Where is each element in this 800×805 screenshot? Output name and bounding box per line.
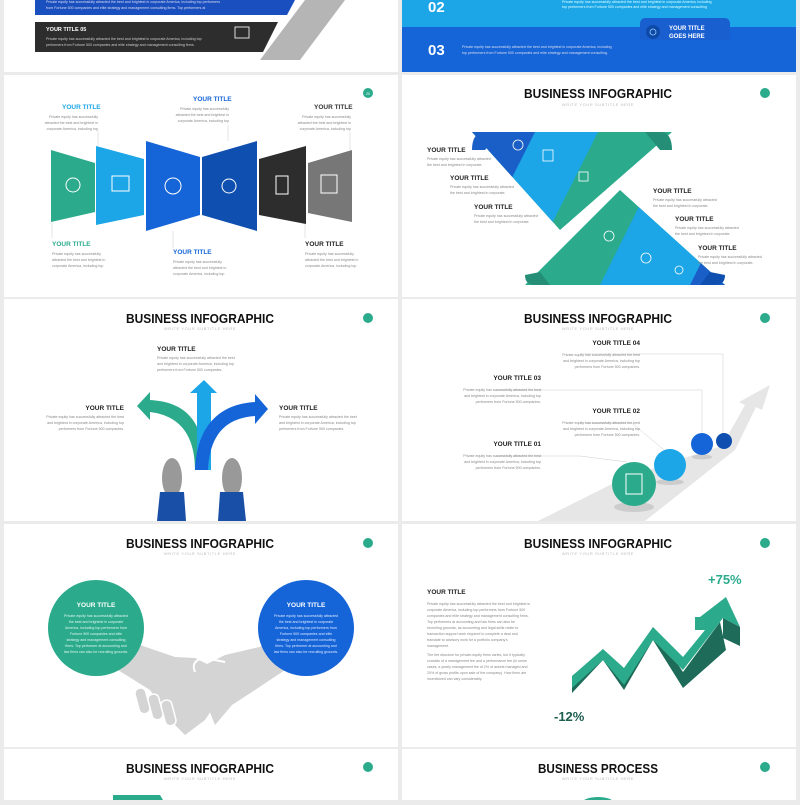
circle: blue: the best and brightest in corporate [279,620,333,624]
panel: slide 23 road: and brightest in corporate America, including top [464,460,541,464]
tab: your title goes here [640,18,730,40]
text blocks: corporate America, including top [52,264,103,268]
circle: teal: firms. Top performer at accounting and [65,644,127,648]
accordion panels [51,141,352,231]
text block: cases, a yearly management fee of 2% of assets managed and [427,665,528,669]
Z text blocks: the best and brightest in corporate. [450,191,506,195]
road arrow [538,385,770,521]
tab: your title goes here: YOUR TITLE [669,26,705,32]
tab: your title goes here: GOES HERE [669,34,705,40]
dark bar: your title 05: performers from Fortune 500 companies and elite strategy and management consulting firms. [46,43,195,47]
text blocks: corporate America, including top [305,264,356,268]
panel: slide 27 (partial): BUSINESS PROCESS [538,761,658,776]
text blocks: attracted the best and brightest in [176,113,229,117]
feet [157,458,246,521]
circle: teal: the best and brightest in corporate [69,620,123,624]
circle: blue: strategy and management consulting [277,638,335,642]
circle: blue: firms. Top performer at accounting and [275,644,337,648]
panel: slide 20 accordion [4,75,398,297]
circle: blue: law firms can also be recruiting grounds. [274,650,338,654]
text blocks: Private equity has successfully [52,252,101,256]
circle: teal: Fortune 500 companies and elite [70,632,122,636]
text blocks: Private equity has successfully [302,115,351,119]
panel: slide top-left (partial): from Fortune 500 companies and elite strategy and management consulting firms. Top performers at [46,6,205,10]
panel: slide 21 Z shape: WRITE YOUR SUBTITLE HERE [562,102,634,107]
arrow text: YOUR TITLE [157,346,196,353]
circle: blue: YOUR TITLE [287,602,326,609]
text blocks: Private equity has successfully [180,107,229,111]
text block: The fee structure for private-equity firms varies, but it typically [427,653,525,657]
dark bar: your title 05: Private equity has successfully attracted the best and brightest in corporate America, including top [46,37,202,41]
text block: consists of a management fee and a performance fee (in some [427,659,527,663]
text blocks: corporate America, including top [300,127,351,131]
Z text blocks: Private equity has successfully attracted [675,226,739,230]
Z text blocks: YOUR TITLE [427,147,466,154]
arrow text: Private equity has successfully attracted the best [157,356,235,360]
panel: slide 23 road: performers from Fortune 500 companies. [476,400,541,404]
circle: teal [48,580,144,676]
arrow text: Private equity has successfully attracted the best [46,415,124,419]
arrow text: and brightest in corporate America, including top [47,421,124,425]
text blocks: attracted the best and brightest in [45,121,98,125]
text blocks: YOUR TITLE [173,249,212,256]
text blocks: Private equity has successfully [173,260,222,264]
text blocks: corporate America, including top [173,272,224,276]
circle: blue [258,580,354,676]
panel: slide 23 road: and brightest in corporate America, including top [464,394,541,398]
arrows [137,380,268,470]
panel: slide 23 road: YOUR TITLE 03 [493,375,541,382]
panel: slide 26 (partial): WRITE YOUR SUBTITLE HERE [164,776,236,781]
Z text blocks: the best and brightest in corporate. [427,163,483,167]
panel: slide top-right (partial): 03 [428,42,445,59]
panel: slide 23 road: and brightest in corporate America, including top [563,359,640,363]
Z text blocks: Private equity has successfully attracted [474,214,538,218]
arrow text: YOUR TITLE [279,405,318,412]
Z text blocks: Private equity has successfully attracted [427,157,491,161]
panel: slide top-right (partial): top performers from Fortune 500 companies and elite strategy and management consulting [562,5,707,9]
text blocks: YOUR TITLE [52,241,91,248]
text blocks: YOUR TITLE [305,241,344,248]
text blocks: YOUR TITLE [62,104,101,111]
circle: teal: law firms can also be recruiting grounds. [64,650,128,654]
panel: slide 25 growth arrow: WRITE YOUR SUBTITLE HERE [562,551,634,556]
text block: Private equity has successfully attracted the best and brightest in [427,602,530,606]
circle: teal: America, including top performers from [65,626,127,630]
panel: slide 25 growth arrow: -12% [554,709,585,724]
panel: slide top-right (partial): Private equity has successfully attracted the best and brightest in corporate America, including [462,45,612,49]
text block: recruiting grounds, as accounting and legal skills relate to [427,626,518,630]
Z text blocks: YOUR TITLE [450,175,489,182]
panel: slide 23 road: and brightest in corporate America, including top [563,427,640,431]
Z text blocks: the best and brightest in corporate. [474,220,530,224]
panel: slide top-right (partial) [402,0,796,72]
circle: blue: America, including top performers from [275,626,337,630]
text blocks: attracted the best and brightest in [52,258,105,262]
Z text blocks: the best and brightest in corporate. [653,204,709,208]
dark bar: your title 05 [35,22,278,52]
panel: slide 23 road [402,299,796,521]
panel: slide 23 road: YOUR TITLE 02 [592,408,640,415]
Z graphic [472,132,725,285]
panel: slide 23 road: WRITE YOUR SUBTITLE HERE [562,326,634,331]
panel: slide 23 road: performers from Fortune 500 companies. [476,466,541,470]
panel: slide 23 road: Private equity has successfully attracted the best [562,421,640,425]
panel: slide 22 crossroads [4,299,398,521]
arrow text: and brightest in corporate America, including top [279,421,356,425]
text blocks: YOUR TITLE [193,96,232,103]
circle: blue: Fortune 500 companies and elite [280,632,332,636]
text blocks: attracted the best and brightest in [173,266,226,270]
text blocks: corporate America, including top [178,119,229,123]
panel: slide 22 crossroads: BUSINESS INFOGRAPHIC [126,311,275,326]
text blocks [45,96,358,276]
panel: slide 26 (partial): BUSINESS INFOGRAPHIC [126,761,275,776]
panel: slide 21 Z shape [400,75,800,297]
panel: slide 25 growth arrow: +75% [708,572,742,587]
circles [612,433,732,512]
arrow text: Private equity has successfully attracted the best [279,415,357,419]
panel: slide 23 road: Private equity has successfully attracted the best [463,388,541,392]
Z text blocks: YOUR TITLE [474,204,513,211]
panel: slide 26 (partial) [4,749,398,800]
panel: slide top-left (partial) [4,0,398,72]
circle: teal: strategy and management consulting [67,638,125,642]
panel: slide 22 crossroads: WRITE YOUR SUBTITLE HERE [164,326,236,331]
arrow text: and brightest in corporate America, including top [157,362,234,366]
arrow text [46,346,357,431]
panel: slide 24 handshake [4,524,398,747]
text block: management. [427,644,449,648]
handshake [118,645,285,735]
arrow text: YOUR TITLE [85,405,125,412]
text block: translate to advisory work for a portfolio company's [427,638,508,642]
dark bar: your title 05: YOUR TITLE 05 [46,27,86,33]
panel: slide 23 road: Private equity has successfully attracted the best [562,353,640,357]
Z text blocks: YOUR TITLE [653,188,692,195]
panel: slide 23 road: YOUR TITLE 01 [493,441,541,448]
panel: slide top-right (partial): top performers from Fortune 500 companies and elite strategy and management consulting. [462,51,608,55]
blue bar [35,0,295,15]
text block: companies and elite strategy and management consulting firms. [427,614,529,618]
panel: slide 23 road: performers from Fortune 500 companies. [575,365,640,369]
panel: slide top-left (partial): Private equity has successfully attracted the best and brightest in corporate America, including top performers [46,0,220,4]
arrow text: performers from Fortune 500 companies. [157,368,222,372]
Z text blocks: Private equity has successfully attracted [653,198,717,202]
Z text blocks: Private equity has successfully attracted [698,255,762,259]
panel: slide 23 road: BUSINESS INFOGRAPHIC [524,311,673,326]
zigzag arrow [572,597,740,693]
panel: slide 24 handshake: BUSINESS INFOGRAPHIC [126,536,275,551]
panel: slide 20 accordion: 20 [366,92,370,96]
arrow text: performers from Fortune 500 companies. [59,427,124,431]
text blocks: attracted the best and brightest in [298,121,351,125]
Z text blocks [427,147,762,265]
Z text blocks: the best and brightest in corporate. [675,232,731,236]
text block: Top performers at accounting and law firms can also be [427,620,515,624]
text block [427,589,530,681]
panel: slide top-right (partial): Private equity has successfully attracted the best and brightest in corporate America, including [562,0,712,4]
arrow text: performers from Fortune 500 companies. [279,427,344,431]
text blocks: Private equity has successfully [305,252,354,256]
panel: slide 27 (partial): WRITE YOUR SUBTITLE HERE [562,776,634,781]
panel: slide 25 growth arrow: BUSINESS INFOGRAPHIC [524,536,673,551]
text block: 20% of gross profits upon sale of the company). How firms are [427,671,526,675]
Z text blocks: Private equity has successfully attracted [450,185,514,189]
text blocks: attracted the best and brightest in [305,258,358,262]
panel: slide 27 (partial) [402,749,796,805]
panel: slide 23 road: Private equity has successfully attracted the best [463,454,541,458]
grey slanted band [260,0,345,60]
circle: blue: Private equity has successfully attracted [274,614,338,618]
Z text blocks: the best and brightest in corporate. [698,261,754,265]
Z text blocks: YOUR TITLE [698,245,737,252]
panel: slide 23 road: YOUR TITLE 04 [592,340,640,347]
circle: teal: YOUR TITLE [77,602,116,609]
panel: slide 24 handshake: WRITE YOUR SUBTITLE HERE [164,551,236,556]
circle: teal: Private equity has successfully attracted [64,614,128,618]
text blocks: Private equity has successfully [49,115,98,119]
text block: transaction support work required to complete a deal and [427,632,518,636]
text block: corporate America, including top performers from Fortune 500 [427,608,525,612]
panel: slide 23 road: performers from Fortune 500 companies. [575,433,640,437]
text blocks: YOUR TITLE [314,104,353,111]
text blocks: corporate America, including top [47,127,98,131]
text block: YOUR TITLE [427,589,466,596]
panel: slide 21 Z shape: BUSINESS INFOGRAPHIC [524,86,673,101]
panel: slide 25 growth arrow [402,524,796,747]
Z text blocks: YOUR TITLE [675,216,714,223]
text block: incentivized can vary considerably. [427,677,482,681]
